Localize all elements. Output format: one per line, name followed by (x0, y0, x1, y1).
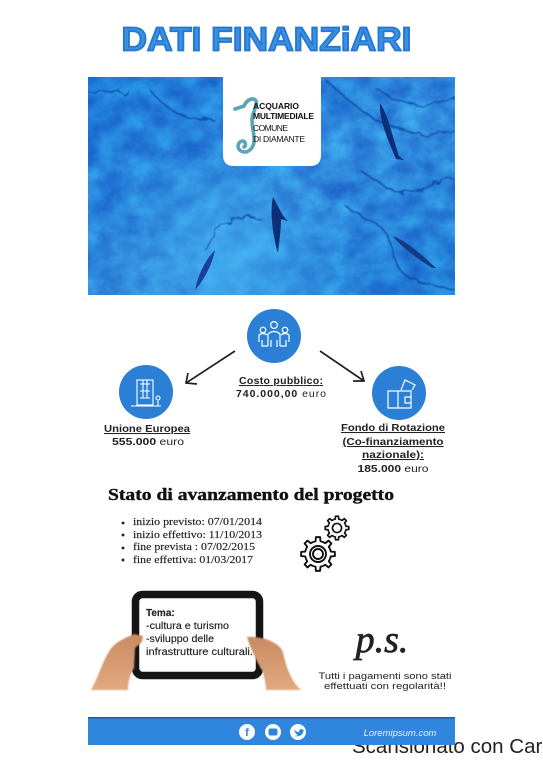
fish: centre (272, 197, 288, 253)
logo panel (223, 77, 321, 166)
footer bar (88, 717, 455, 745)
left hand (91, 634, 143, 690)
logo text: MULTIMEDIALE (253, 111, 314, 121)
icon: seahorse (235, 99, 256, 152)
text: fondo di rotazione: (Co-finanziamento (342, 436, 444, 448)
text: p.s. note: effettuati con regolarità!! (324, 681, 446, 692)
text: unione europea (104, 423, 190, 448)
text block: dates list (122, 517, 263, 566)
icon: building circle (119, 365, 173, 419)
fish: bottom right (393, 236, 436, 268)
icon: facebook (239, 724, 255, 740)
text: fondo di rotazione (341, 422, 445, 475)
text: website: Loremipsum.com (364, 728, 437, 739)
icon: wallet circle (372, 366, 426, 420)
text block: dates list: inizio previsto: 07/01/2014 (133, 517, 263, 528)
logo text: DI DIAMANTE (253, 134, 305, 144)
text: tema: Tema: (146, 608, 175, 619)
title: DATI FINANZiARI (122, 20, 412, 58)
text: costo pubblico: Costo pubblico: (239, 375, 323, 387)
arrow: to Fondo di Rotazione (320, 351, 364, 381)
text: p.s. note: p.s. (353, 619, 408, 661)
icon: people circle (247, 309, 301, 363)
illustration: tablet held by hands (91, 594, 301, 690)
text: tema: -sviluppo delle (146, 634, 214, 645)
text: tema (146, 608, 253, 658)
text block: dates list: fine prevista : 07/02/2015 (133, 542, 255, 553)
icon: youtube (265, 724, 281, 740)
text block: dates list: inizio effettivo: 11/10/2013 (133, 530, 262, 541)
icon: twitter (290, 724, 306, 740)
logo text: ACQUARIO (253, 101, 299, 111)
text: p.s. note: Tutti i pagamenti sono stati (318, 671, 452, 682)
icon: facebook: f (245, 727, 249, 739)
icon: gears (301, 516, 349, 571)
text: fondo di rotazione: 185.000 euro (358, 463, 429, 475)
text: unione europea: Unione Europea (104, 423, 190, 435)
scanner watermark: Scansionato con Car (352, 735, 542, 758)
panel: aquarium photo (88, 77, 455, 295)
tablet (136, 594, 260, 676)
arrow: to Unione Europea (186, 351, 235, 384)
logo text (253, 101, 314, 144)
text: p.s. note (318, 619, 452, 692)
text: tema: -cultura e turismo (146, 621, 229, 632)
text: unione europea: 555.000 euro (112, 436, 184, 448)
text: fondo di rotazione: Fondo di Rotazione (341, 422, 445, 434)
logo text: COMUNE (253, 123, 288, 133)
fish: bottom left (195, 250, 215, 290)
text: costo pubblico: 740.000,00 euro (236, 388, 326, 400)
text block: dates list: fine effettiva: 01/03/2017 (133, 555, 253, 566)
text: tema: infrastrutture culturali. (146, 647, 253, 658)
right hand (247, 637, 301, 690)
heading: stato di avanzamento: Stato di avanzamento del progetto (108, 485, 394, 504)
text: costo pubblico (236, 375, 326, 400)
text: fondo di rotazione: nazionale): (362, 449, 424, 461)
fish: top right (380, 103, 404, 160)
